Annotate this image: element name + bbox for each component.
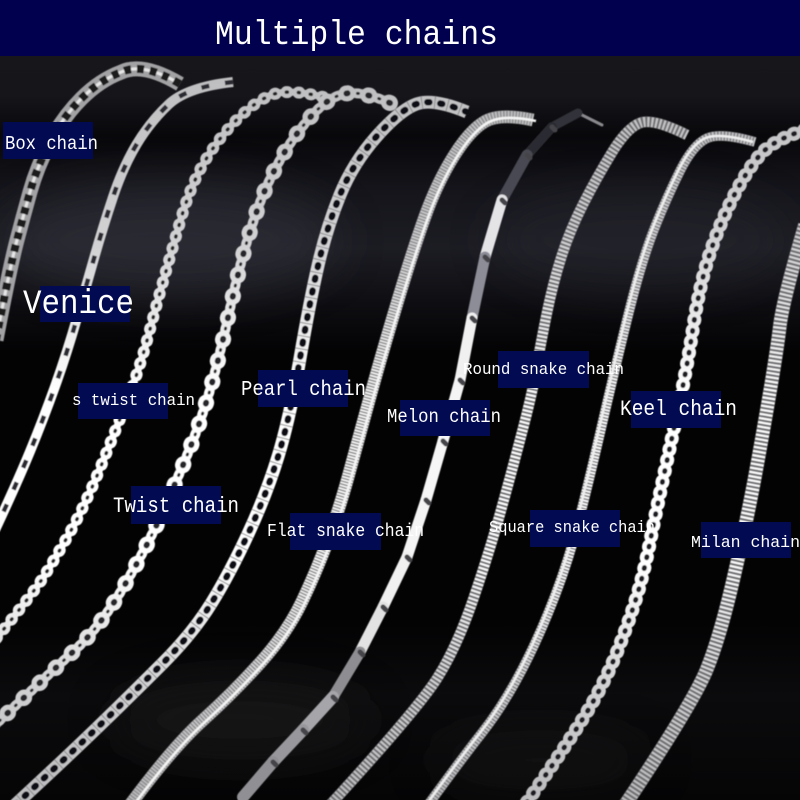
chain: box chain: [0, 69, 180, 340]
chain: venice: [0, 82, 233, 530]
chain: pearl chain: [15, 102, 467, 800]
chain: square snake chain: [426, 136, 755, 800]
label: Pearl chain: [241, 370, 366, 407]
label: Keel chain: [620, 391, 737, 428]
chain: melon bar chain: [243, 113, 602, 797]
label: Twist chain: [113, 486, 239, 524]
chain: twist rope chain: [0, 93, 390, 725]
chain: flat snake chain: [130, 117, 536, 800]
label: Milan chain: Milan chain: [691, 534, 800, 553]
title bar: [0, 0, 800, 56]
label: Melon chain: Melon chain: [387, 406, 501, 428]
label: Flat snake chain: [267, 513, 424, 550]
chain: milan chain: [525, 130, 800, 800]
label: s twist chain: [72, 383, 195, 419]
label: Box chain: Box chain: [5, 133, 98, 155]
label: Melon chain: [387, 400, 501, 436]
label: Square snake chain: Square snake chain: [489, 519, 655, 538]
chain: s twist chain: [0, 92, 323, 640]
label: Box chain: [3, 122, 98, 159]
label: Venice: Venice: [23, 286, 134, 324]
label: Square snake chain: [489, 510, 655, 547]
label: s twist chain: s twist chain: [72, 392, 195, 411]
label: Milan chain: [691, 522, 800, 558]
chain: keel chain: [625, 225, 800, 800]
label: Round snake chain: Round snake chain: [463, 361, 624, 380]
label: Round snake chain: [463, 351, 624, 388]
chain: round snake chain: [330, 122, 687, 800]
title bar: Multiple chains: [215, 17, 498, 55]
label: Flat snake chain: Flat snake chain: [267, 522, 424, 542]
label: Keel chain: Keel chain: [620, 397, 737, 422]
label: Twist chain: Twist chain: [113, 494, 239, 519]
label: Pearl chain: Pearl chain: [241, 379, 366, 402]
